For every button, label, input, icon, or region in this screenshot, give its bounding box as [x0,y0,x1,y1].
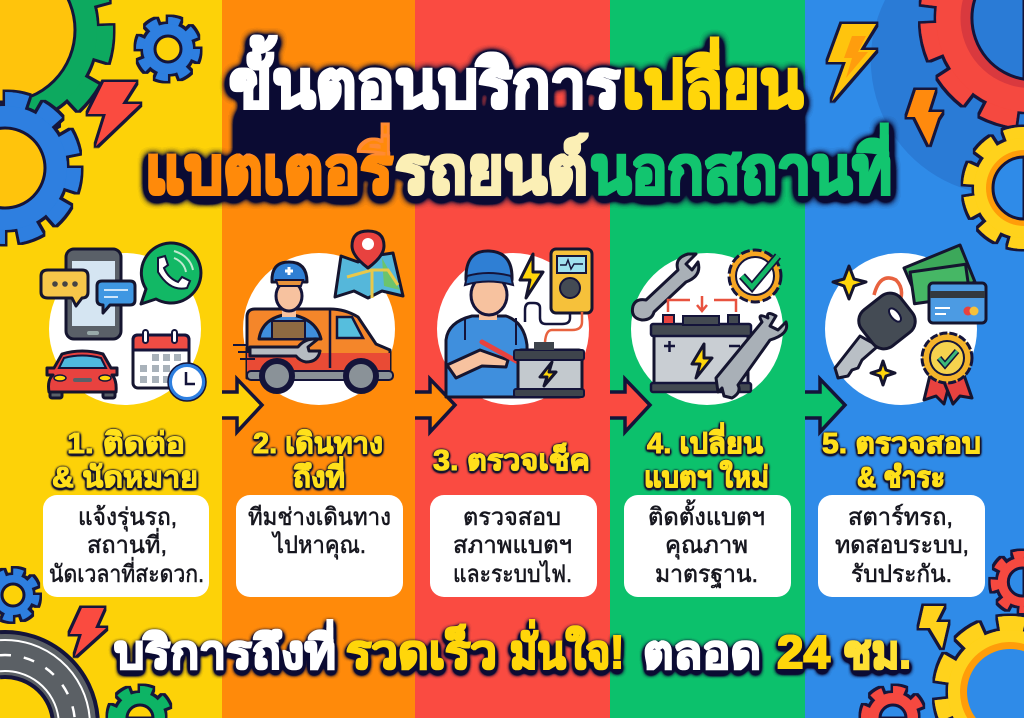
icon: calendar [133,330,189,388]
text box 1: แจ้งรุ่นรถ, [78,504,177,532]
icon: check badge [729,250,781,302]
text box 5: สตาร์ทรถ, [848,503,953,531]
text box 3 [430,495,597,597]
icon: sparkle small [871,361,895,385]
gear: green bottom [113,691,167,718]
icon: yellow bolt top-right [828,24,876,101]
heading 2 [253,428,383,494]
background: yellow column [0,0,222,718]
text box 1: สถานที่, [87,528,167,559]
icon: van mechanic [259,262,321,339]
icon: clock [168,363,206,401]
gear: yellow bottom-right [942,624,1024,718]
footer slogan: ตลอด [643,626,761,678]
panel: step 4 [624,250,791,597]
gear: small blue bottom-left [0,573,35,617]
icon: mechanic [446,251,528,397]
background: darker blue blob [871,0,1024,195]
icon: phone [66,249,121,339]
footer slogan: ชม. [843,626,911,678]
gear: large blue left [0,100,73,236]
icon: blue chat bubble [97,281,135,313]
text box 1: นัดเวลาที่สะดวก. [49,557,204,588]
icon: multimeter [551,249,592,313]
panel: step 2 [233,231,403,597]
text box 2 [236,495,403,597]
text box 1 [43,495,209,597]
heading 5 [822,428,981,494]
gear: large green top-left [0,0,103,130]
panel: step 5 [818,245,986,597]
icon: red bolt left [88,82,140,146]
text box 4 [624,495,791,597]
title line 1 white: ขั้นตอนบริการ [229,35,620,121]
heading 1: 1. ติดต่อ [67,428,185,460]
arrow 4 to 5 [805,379,845,432]
heading 1 [52,428,198,494]
title line 2 green: นอกสถานที่ [590,123,892,207]
icon: yellow chat bubble [41,270,88,306]
background: green column [610,0,805,718]
text box 3: ตรวจสอบ [463,504,561,531]
title line 2 cream: รถยนต์ [395,133,588,207]
footer slogan [114,620,911,678]
icon: map pin [352,231,384,268]
icon circle 1 [49,253,201,405]
arrow 1 to 2 [222,379,262,432]
background: red column [415,0,610,718]
text box 2: ทีมช่างเดินทาง [248,504,391,531]
road [0,632,98,718]
icon: money [904,245,975,304]
icon: map [335,253,403,298]
icon: wrench right [716,314,787,398]
icon: red car [47,351,117,398]
heading 3: 3. ตรวจเช็ค [433,442,590,477]
heading 2: 2. เดินทาง [253,428,383,460]
text box 5: ทดสอบระบบ, [835,532,969,559]
icon: sparkle large [833,266,866,299]
title plate [240,112,798,154]
icon: van [247,309,393,391]
icon: red arrow brackets [668,296,736,312]
heading 4 [644,422,769,494]
gear: yellow right [970,134,1024,242]
text box 4: คุณภาพ [665,532,748,560]
icon: lightning [520,254,543,298]
panel: step 1 [41,243,209,597]
icon: red bolt bottom-left [70,608,106,656]
icon: meter wires [525,303,582,342]
text box 4: มาตรฐาน. [655,561,758,588]
icon: wrench on van [233,339,320,362]
text box 2: ไปหาคุณ. [271,531,366,560]
panel: step 3 [430,249,597,597]
gear: small red right [996,556,1024,608]
footer slogan: มั่นใจ! [510,620,624,678]
text box 3: สภาพแบตฯ [453,532,572,559]
text box 5 [818,495,985,597]
text box 5: รับประกัน. [851,561,952,588]
footer slogan: บริการถึงที่ [114,620,336,678]
gear: red bottom [866,691,920,718]
icon circle 2 [243,253,395,405]
icon: yellow bolt bottom-right [919,606,948,648]
heading 5: & ชำระ [857,462,945,494]
icon: orange bolt right [907,90,942,145]
icon: whatsapp [141,243,201,304]
title [145,35,892,207]
background: orange column [222,0,415,718]
icon: credit card [929,283,986,323]
gear: small blue top [141,22,195,76]
heading 1: & นัดหมาย [52,462,198,494]
icon: wrench left [632,254,699,320]
heading 4: แบตฯ ใหม่ [644,460,769,494]
icon circle 3 [437,253,589,405]
title line 1 yellow: เปลี่ยน [622,37,803,121]
icon: battery [514,342,584,397]
icon: medal [922,333,972,404]
arrow 2 to 3 [415,379,455,432]
footer slogan: รวดเร็ว [346,624,497,678]
footer slogan: 24 [777,626,830,678]
title line 2 orange: แบตเตอรี่ [145,123,393,207]
text box 3: และระบบไฟ. [453,560,572,588]
icon: battery [651,315,751,392]
text box 4: ติดตั้งแบตฯ [648,499,765,531]
icon circle 4 [631,253,783,405]
background: blue column [805,0,1024,718]
heading 5: 5. ตรวจสอบ [822,428,981,460]
icon: key [835,278,921,378]
heading 2: ถึงที่ [293,456,345,494]
arrow 3 to 4 [610,379,650,432]
gear: red top-right [930,0,1024,118]
icon circle 5 [825,253,977,405]
heading 4: 4. เปลี่ยน [647,422,763,460]
